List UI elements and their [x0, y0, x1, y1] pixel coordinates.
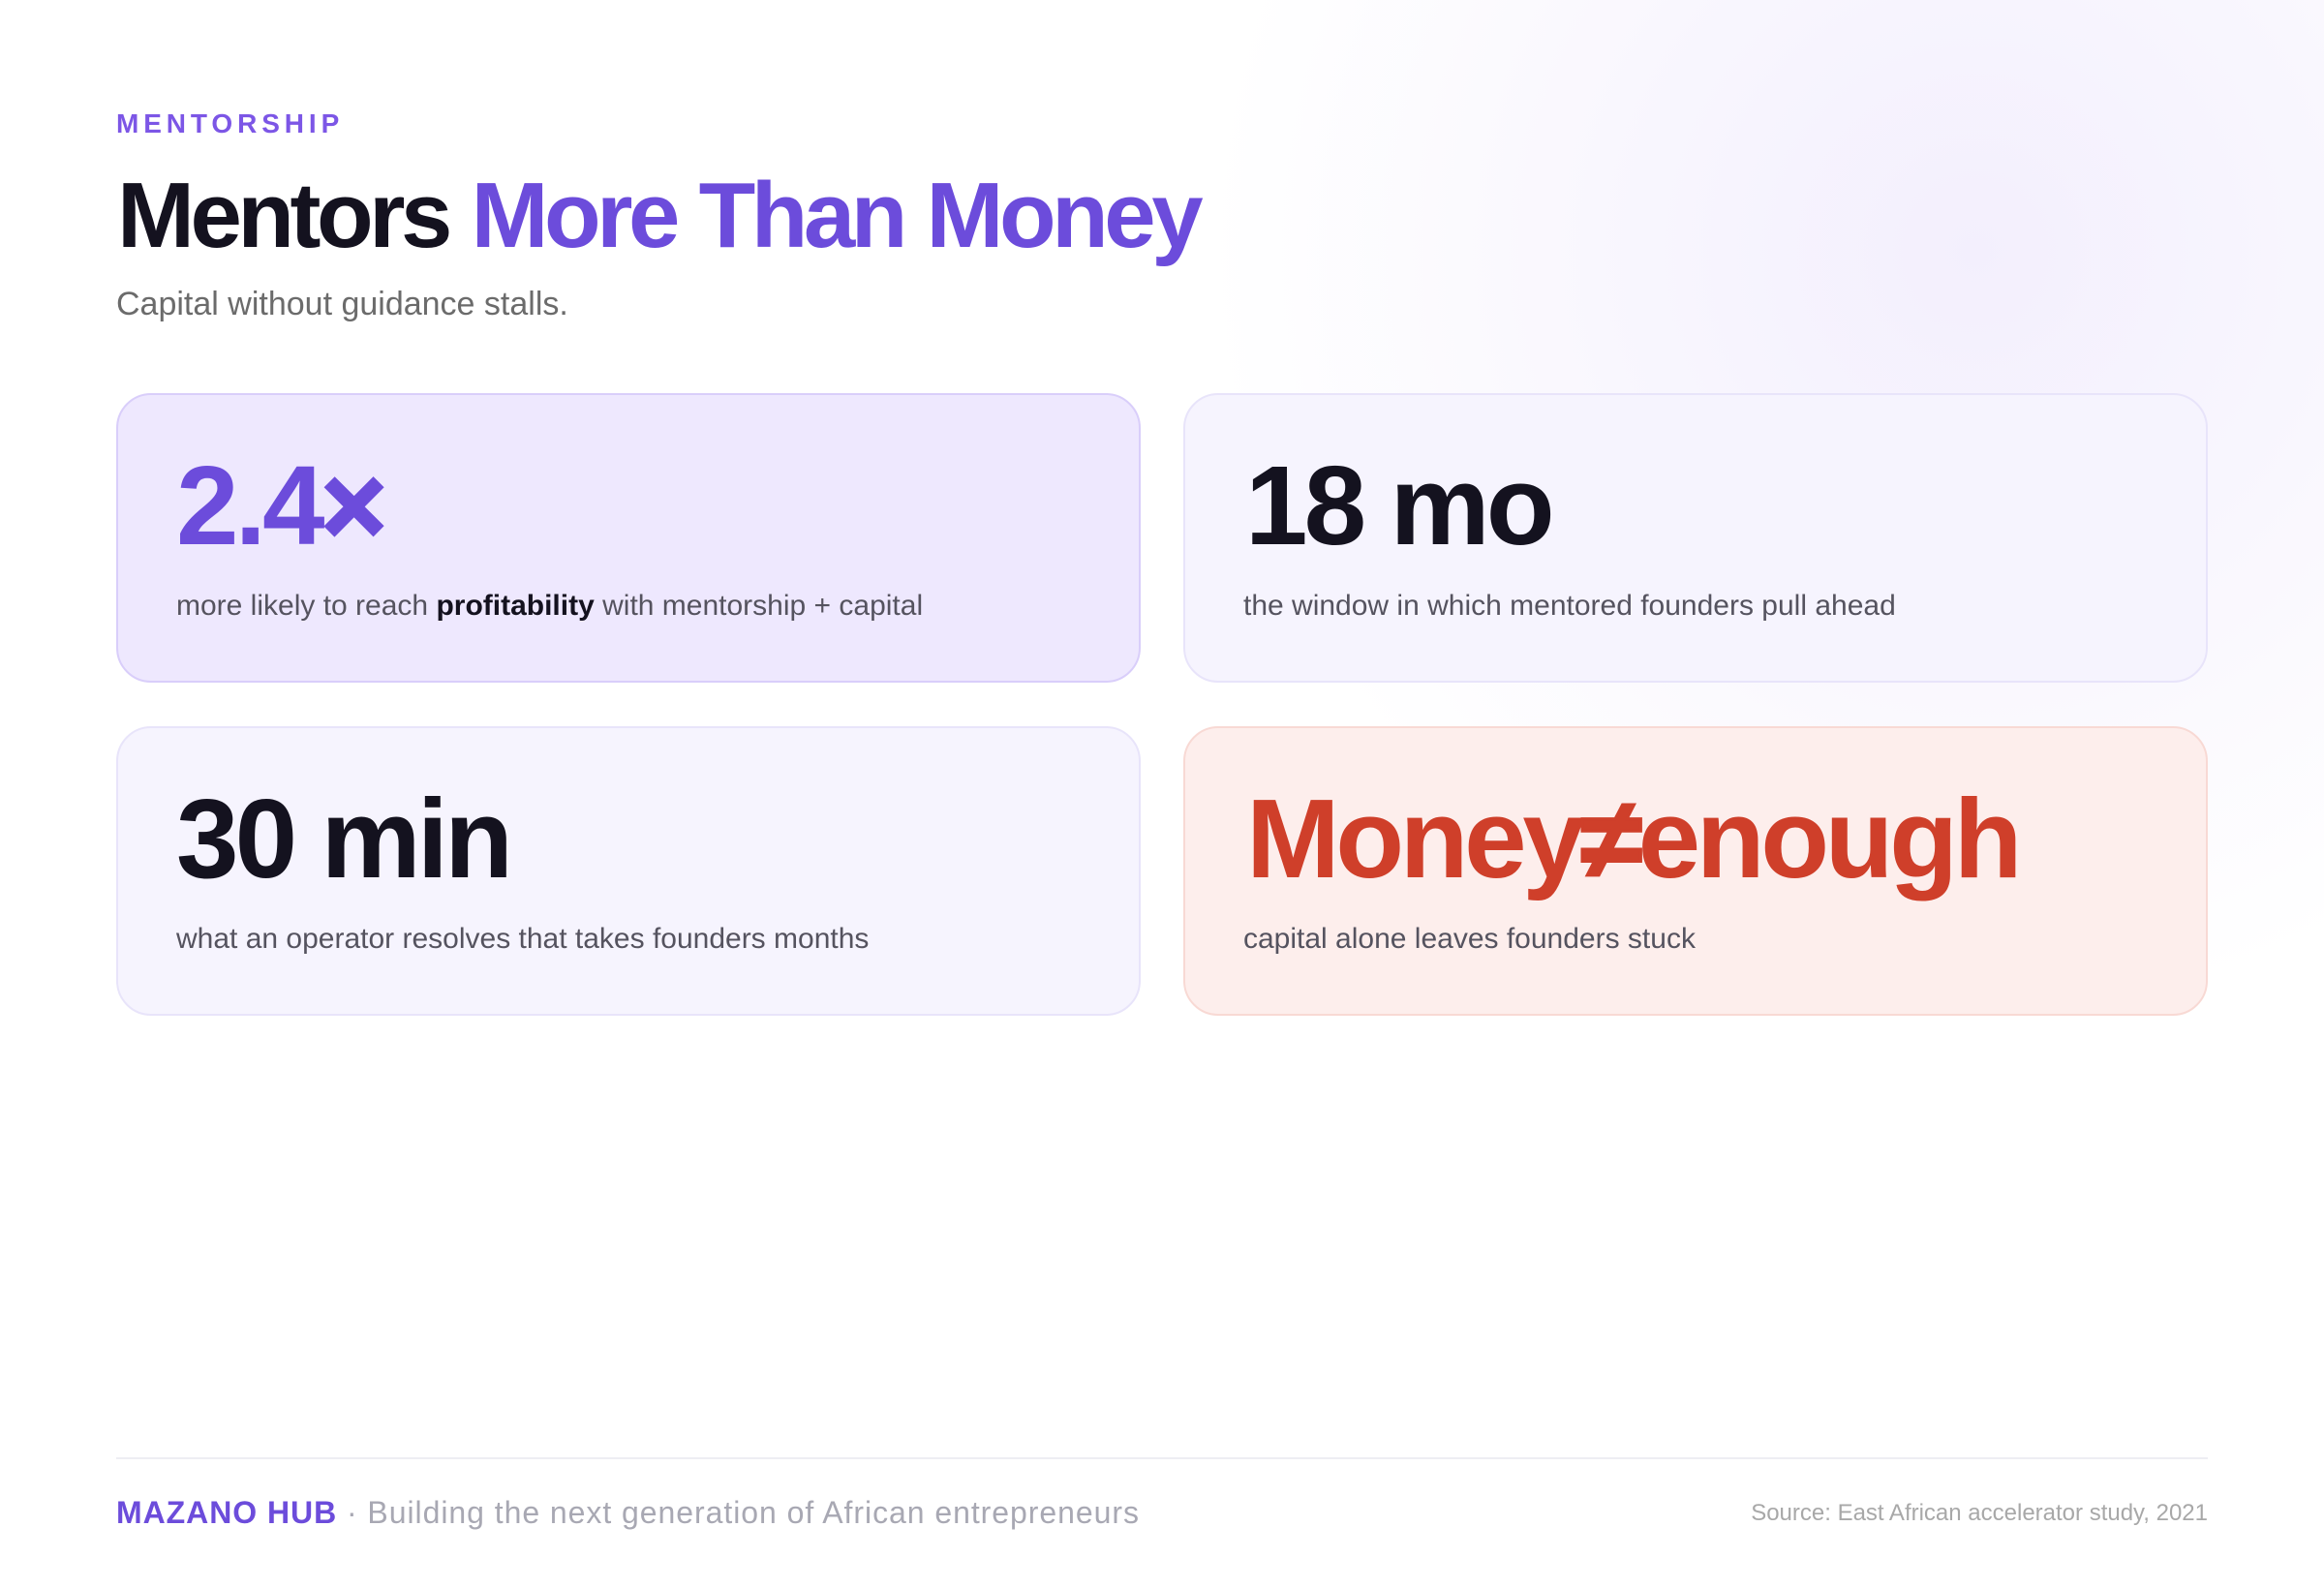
panel: money not enough stat: [1183, 726, 2208, 1016]
eyebrow label: MENTORSHIP: [116, 108, 344, 138]
background glow: [1201, 0, 2324, 1026]
stat number: Money≠enough: [1246, 776, 2018, 901]
panel: 30 min stat: [116, 726, 1141, 1016]
source note: Source: East African accelerator study, 2021: [1751, 1500, 2208, 1526]
stat description: more likely to reach profitability with mentorship + capital: [176, 590, 923, 622]
stat number: 18 mo: [1245, 443, 1551, 568]
stat number: 30 min: [176, 776, 509, 901]
footer brand line: MAZANO HUB · Building the next generation of African entrepreneurs: [116, 1495, 1140, 1530]
stat description: capital alone leaves founders stuck: [1243, 923, 1696, 955]
subtitle: Capital without guidance stalls.: [116, 286, 568, 322]
stat description: what an operator resolves that takes founders months: [176, 923, 869, 955]
panel: 2.4x stat: [116, 393, 1141, 683]
stat description: the window in which mentored founders pull ahead: [1243, 590, 1896, 622]
title: Mentors More Than Money: [117, 164, 1199, 267]
stat number: 2.4×: [176, 443, 382, 568]
panel: 18 mo stat: [1183, 393, 2208, 683]
